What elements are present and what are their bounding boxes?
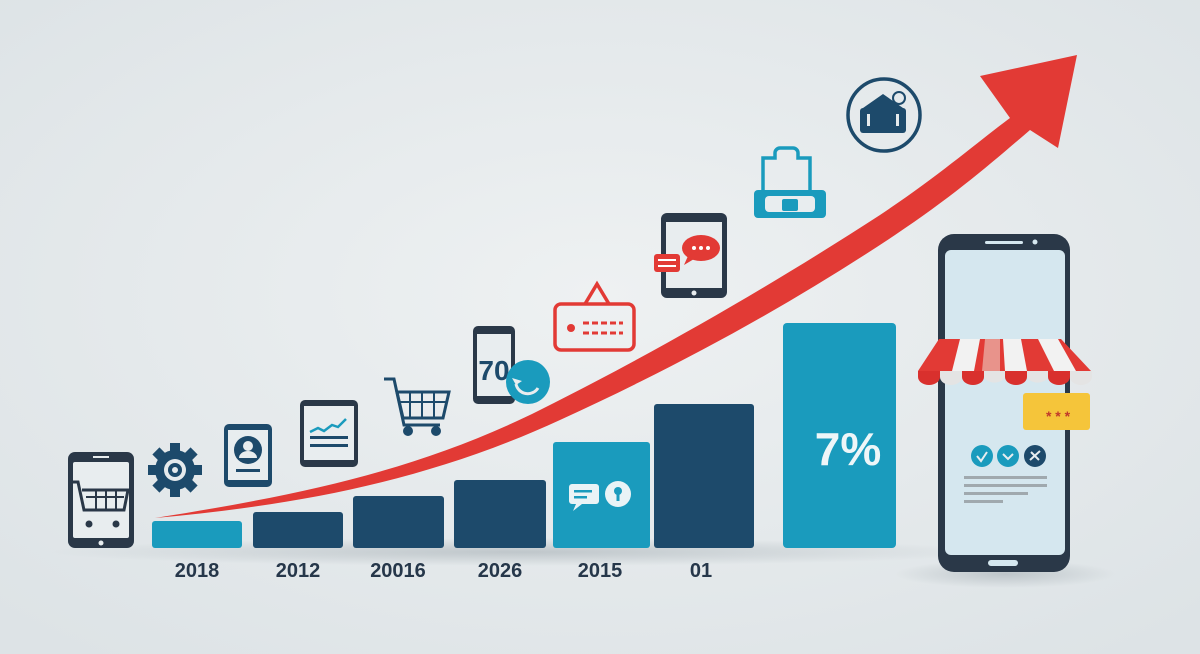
bar 7% bbox=[783, 323, 896, 548]
icon: tablet with chat bbox=[654, 213, 727, 298]
year labels: 2018 bbox=[175, 560, 219, 582]
year labels bbox=[175, 560, 712, 582]
bar 20016 bbox=[353, 496, 444, 548]
icon: phone with cart bbox=[68, 452, 134, 548]
bar 2012 bbox=[253, 512, 343, 548]
icon: teal bag bbox=[754, 148, 826, 218]
year labels: 20016 bbox=[370, 560, 426, 582]
icon: tablet 70 with refresh bbox=[473, 326, 550, 404]
bar chart bbox=[152, 323, 896, 548]
bar 2018 bbox=[152, 521, 242, 548]
bar 2026 bbox=[454, 480, 546, 548]
ticket bbox=[1023, 393, 1090, 430]
text lines bbox=[964, 476, 1047, 479]
awning bbox=[918, 339, 1092, 385]
arrow: growth trend bbox=[155, 55, 1077, 518]
phone storefront bbox=[918, 234, 1092, 572]
icon: tablet with profile bbox=[224, 424, 272, 487]
icon: tablet 70 with refresh: 70 bbox=[478, 355, 510, 386]
icon: tablet with chart bbox=[300, 400, 358, 467]
icon: red basket bbox=[555, 284, 634, 350]
value 7%: 7% bbox=[815, 423, 881, 475]
check icons bbox=[971, 445, 993, 467]
year labels: 01 bbox=[690, 560, 712, 582]
year labels: 2026 bbox=[478, 560, 522, 582]
icon: gear bbox=[148, 443, 202, 497]
bar 01 bbox=[654, 404, 754, 548]
icon: shopping cart bbox=[384, 379, 449, 434]
bar 2015 bbox=[553, 442, 650, 548]
icon: circle store bbox=[848, 79, 920, 151]
year labels: 2012 bbox=[276, 560, 320, 582]
phone storefront: * * * bbox=[1046, 408, 1071, 424]
icon: chat and key on bar bbox=[569, 481, 631, 511]
year labels: 2015 bbox=[578, 560, 622, 582]
